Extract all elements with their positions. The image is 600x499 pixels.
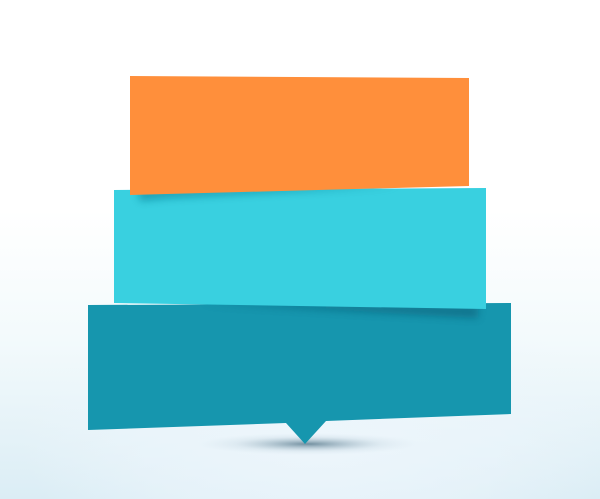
shadow cast by cyan banner xyxy=(257,306,480,320)
panel: top orange banner xyxy=(130,76,469,195)
panel: middle cyan banner xyxy=(114,186,486,309)
ground shadow xyxy=(196,433,420,455)
teal banner shape xyxy=(88,303,511,444)
shadow cast by orange banner xyxy=(136,189,356,204)
panel: bottom teal speech banner xyxy=(88,303,511,444)
cyan banner shape xyxy=(114,188,486,309)
